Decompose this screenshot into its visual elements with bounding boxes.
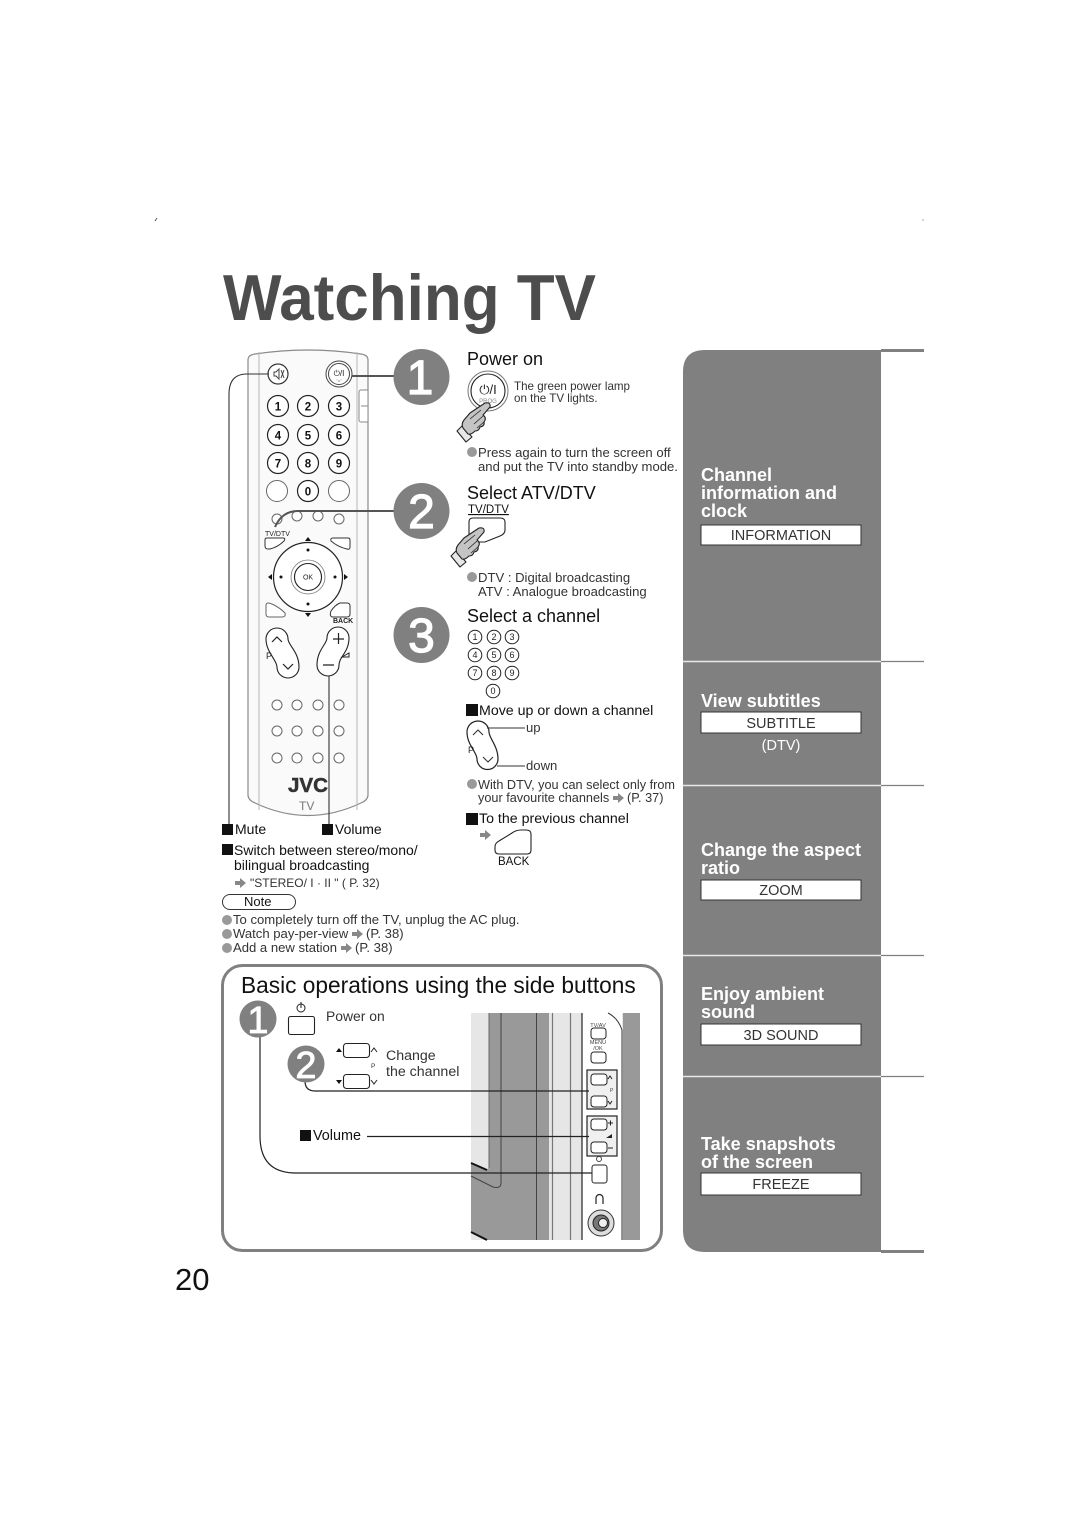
section: channel information: information and [701, 483, 837, 503]
colour keys [272, 511, 344, 524]
TV side illustration: /OK [593, 1046, 603, 1052]
back key [495, 830, 531, 854]
section: ambient sound: 3D SOUND [744, 1028, 818, 1044]
note line 2: Watch pay-per-view [233, 926, 349, 941]
header rule [881, 349, 924, 352]
subheading: To the previous channel [479, 811, 629, 827]
power key icon: ⏻/I [479, 382, 497, 397]
number labels: 0 [305, 486, 311, 498]
digit labels: 0 [490, 686, 496, 696]
bullet [467, 447, 477, 457]
section: snapshots: FREEZE [752, 1177, 810, 1193]
number keys [268, 396, 350, 502]
section: subtitles [701, 691, 861, 754]
power button: °o° [336, 378, 342, 383]
bullet [467, 572, 477, 582]
number labels [275, 402, 342, 498]
note ref 3: (P. 38) [355, 940, 393, 955]
mute marker [222, 824, 233, 835]
panel heading: Basic operations using the side buttons [241, 972, 636, 998]
side step 1 badge: 1 [247, 1000, 269, 1042]
digit labels: 2 [491, 632, 497, 642]
section: aspect ratio: Change the aspect [701, 840, 861, 860]
note text: The green power lamp [514, 380, 630, 393]
panel: basic operations using the side buttons: the channel [386, 1064, 459, 1080]
section: aspect ratio: ZOOM [759, 883, 803, 899]
connector: power [352, 375, 400, 377]
icon: arrow [341, 943, 352, 953]
number labels: 4 [275, 430, 282, 442]
stereo text: Switch between stereo/mono/ [234, 842, 418, 858]
connector: step 2 [305, 1081, 589, 1091]
digit labels: 6 [509, 650, 515, 660]
step 1: power on [457, 349, 678, 474]
side button: power [592, 1165, 607, 1183]
remote callouts [222, 821, 418, 890]
digit labels: 8 [491, 668, 497, 678]
side step 2 badge: 2 [295, 1045, 317, 1087]
mute label: Mute [235, 821, 266, 837]
P rocker: P [266, 651, 272, 661]
digit labels: 3 [509, 632, 515, 642]
key label: TV/DTV [468, 504, 509, 516]
page number: 20 [175, 1262, 209, 1297]
navigation ring: OK [303, 574, 313, 582]
heading: Select ATV/DTV [467, 483, 596, 503]
step number 1: 1 [407, 352, 433, 405]
title: Watching TV [223, 261, 596, 334]
volume marker [322, 824, 333, 835]
section: channel information: Channel [701, 465, 772, 485]
TV label: TV [299, 799, 314, 813]
connector: TV/DTV [275, 511, 400, 527]
section: snapshots: of the screen [701, 1152, 813, 1172]
section: channel information: clock [701, 501, 748, 521]
section: snapshots [701, 1134, 861, 1195]
connector: mute [229, 374, 269, 824]
step number 2 [394, 483, 450, 539]
volume label: Volume [335, 821, 382, 837]
power button icon [288, 1002, 314, 1034]
digit keys [468, 630, 519, 698]
corner keys [265, 538, 350, 617]
number labels: 2 [305, 402, 311, 414]
stereo marker [222, 844, 233, 855]
key icon [469, 518, 505, 542]
remote control illustration [248, 350, 368, 816]
icon: pointing hand [451, 528, 484, 567]
number labels: 7 [275, 458, 281, 470]
digit labels: 4 [472, 650, 478, 660]
mute button [268, 364, 288, 384]
step 2: select ATV/DTV: ATV : Analogue broadcasting [478, 584, 647, 599]
step number 1 [394, 349, 450, 405]
digit labels: 1 [472, 632, 478, 642]
number labels: 1 [275, 402, 282, 414]
icon: arrow [613, 793, 624, 803]
side step 2 badge [288, 1045, 324, 1087]
section: aspect ratio [701, 840, 861, 900]
note line 3: Add a new station [233, 940, 337, 955]
digit labels [472, 632, 515, 696]
channel button group [587, 1070, 617, 1109]
step 3: select a channel: your favourite channels [478, 791, 609, 805]
note line 1: To completely turn off the TV, unplug the AC plug. [233, 912, 520, 927]
icon: arrow [235, 878, 246, 888]
power key icon: PROG [479, 399, 497, 405]
note [222, 894, 520, 955]
section: aspect ratio: ratio [701, 858, 740, 878]
stereo reference: "STEREO/ I · II " ( P. 32) [250, 876, 380, 890]
channel rocker [467, 721, 525, 770]
panel frame [222, 966, 662, 1250]
icon: pointing hand [457, 403, 490, 442]
footer rule [881, 1250, 924, 1253]
section: channel information: INFORMATION [731, 528, 831, 544]
step 1: power on: on the TV lights. [514, 392, 598, 405]
TV/DTV label: TV/DTV [265, 531, 290, 538]
number labels: 9 [336, 458, 342, 470]
volume button group [587, 1116, 617, 1156]
power key icon [468, 371, 508, 411]
remote body [248, 350, 368, 816]
section: subtitles: (DTV) [762, 738, 800, 754]
panel: sidebar [683, 349, 924, 1253]
square marker [466, 704, 478, 716]
note pill [222, 894, 296, 910]
connector: volume [328, 676, 330, 824]
crop mark: left [155, 218, 157, 221]
subheading: Move up or down a channel [479, 703, 653, 719]
crop mark: right [922, 219, 924, 221]
JVC logo: JVC [288, 775, 328, 797]
section: subtitles: SUBTITLE [746, 716, 816, 732]
icon: arrow [480, 830, 491, 840]
side step 1 badge [240, 1000, 276, 1042]
connector: volume [367, 1136, 589, 1138]
step number 3: 3 [408, 610, 435, 663]
power button: ⏻/I [334, 369, 344, 378]
back label: BACK [333, 618, 353, 625]
down label: down [526, 758, 557, 773]
P rocker [266, 628, 299, 678]
number labels: 5 [305, 430, 312, 442]
navigation ring [268, 537, 348, 617]
step number 2: 2 [408, 486, 435, 539]
number labels: 8 [305, 458, 312, 470]
digit labels: 5 [491, 650, 497, 660]
channel rocker: P [468, 745, 474, 755]
function keys [272, 700, 344, 763]
power button [326, 361, 352, 387]
volume label: Volume [313, 1128, 361, 1144]
digit labels: 9 [509, 668, 515, 678]
icon: headphones [596, 1195, 603, 1204]
number labels: 6 [336, 430, 342, 442]
volume marker [300, 1130, 311, 1141]
panel: basic operations using the side buttons [222, 966, 662, 1250]
side button: menu [591, 1052, 606, 1063]
heading: Power on [467, 349, 543, 369]
page ref: (P. 37) [627, 791, 663, 805]
power on label: Power on [326, 1008, 385, 1024]
connector: step 1 [260, 1037, 592, 1173]
side button: TV/AV [591, 1028, 606, 1039]
note label: Note [244, 894, 271, 909]
bullet text: DTV : Digital broadcasting [478, 570, 630, 585]
section: snapshots: Take snapshots [701, 1134, 836, 1154]
section: ambient sound: sound [701, 1002, 755, 1022]
square marker [466, 813, 478, 825]
step number 3 [394, 607, 450, 663]
side button labels: TV/AV [590, 1023, 606, 1029]
section: ambient sound [701, 984, 861, 1045]
bullet text: Press again to turn the screen off [478, 445, 671, 460]
note ref 2: (P. 38) [366, 926, 404, 941]
step 1: power on: and put the TV into standby mode. [478, 459, 678, 474]
digit labels: 7 [472, 668, 478, 678]
change the channel label: Change [386, 1048, 436, 1064]
remote callouts: bilingual broadcasting [234, 857, 369, 873]
sidebar background [683, 350, 881, 1252]
section: ambient sound: Enjoy ambient [701, 984, 824, 1004]
heading: Select a channel [467, 606, 600, 626]
step 3: select a channel [466, 606, 675, 868]
icon: arrow [352, 929, 363, 939]
bullet [467, 779, 477, 789]
number labels: 3 [336, 402, 342, 414]
volume rocker [317, 627, 349, 676]
headphone jack [588, 1210, 614, 1236]
section: channel information [701, 465, 861, 545]
up label: up [526, 720, 541, 735]
note bullets [222, 915, 232, 953]
TV side illustration: MENU [590, 1040, 606, 1046]
channel buttons icon: P [371, 1063, 375, 1070]
section: subtitles: View subtitles [701, 691, 821, 711]
step 2: select ATV/DTV [451, 483, 647, 599]
channel button group: P [610, 1088, 614, 1094]
TV side illustration [471, 1013, 640, 1240]
channel buttons icon [336, 1044, 377, 1088]
back label: BACK [498, 856, 530, 868]
bullet text: With DTV, you can select only from [478, 778, 675, 792]
